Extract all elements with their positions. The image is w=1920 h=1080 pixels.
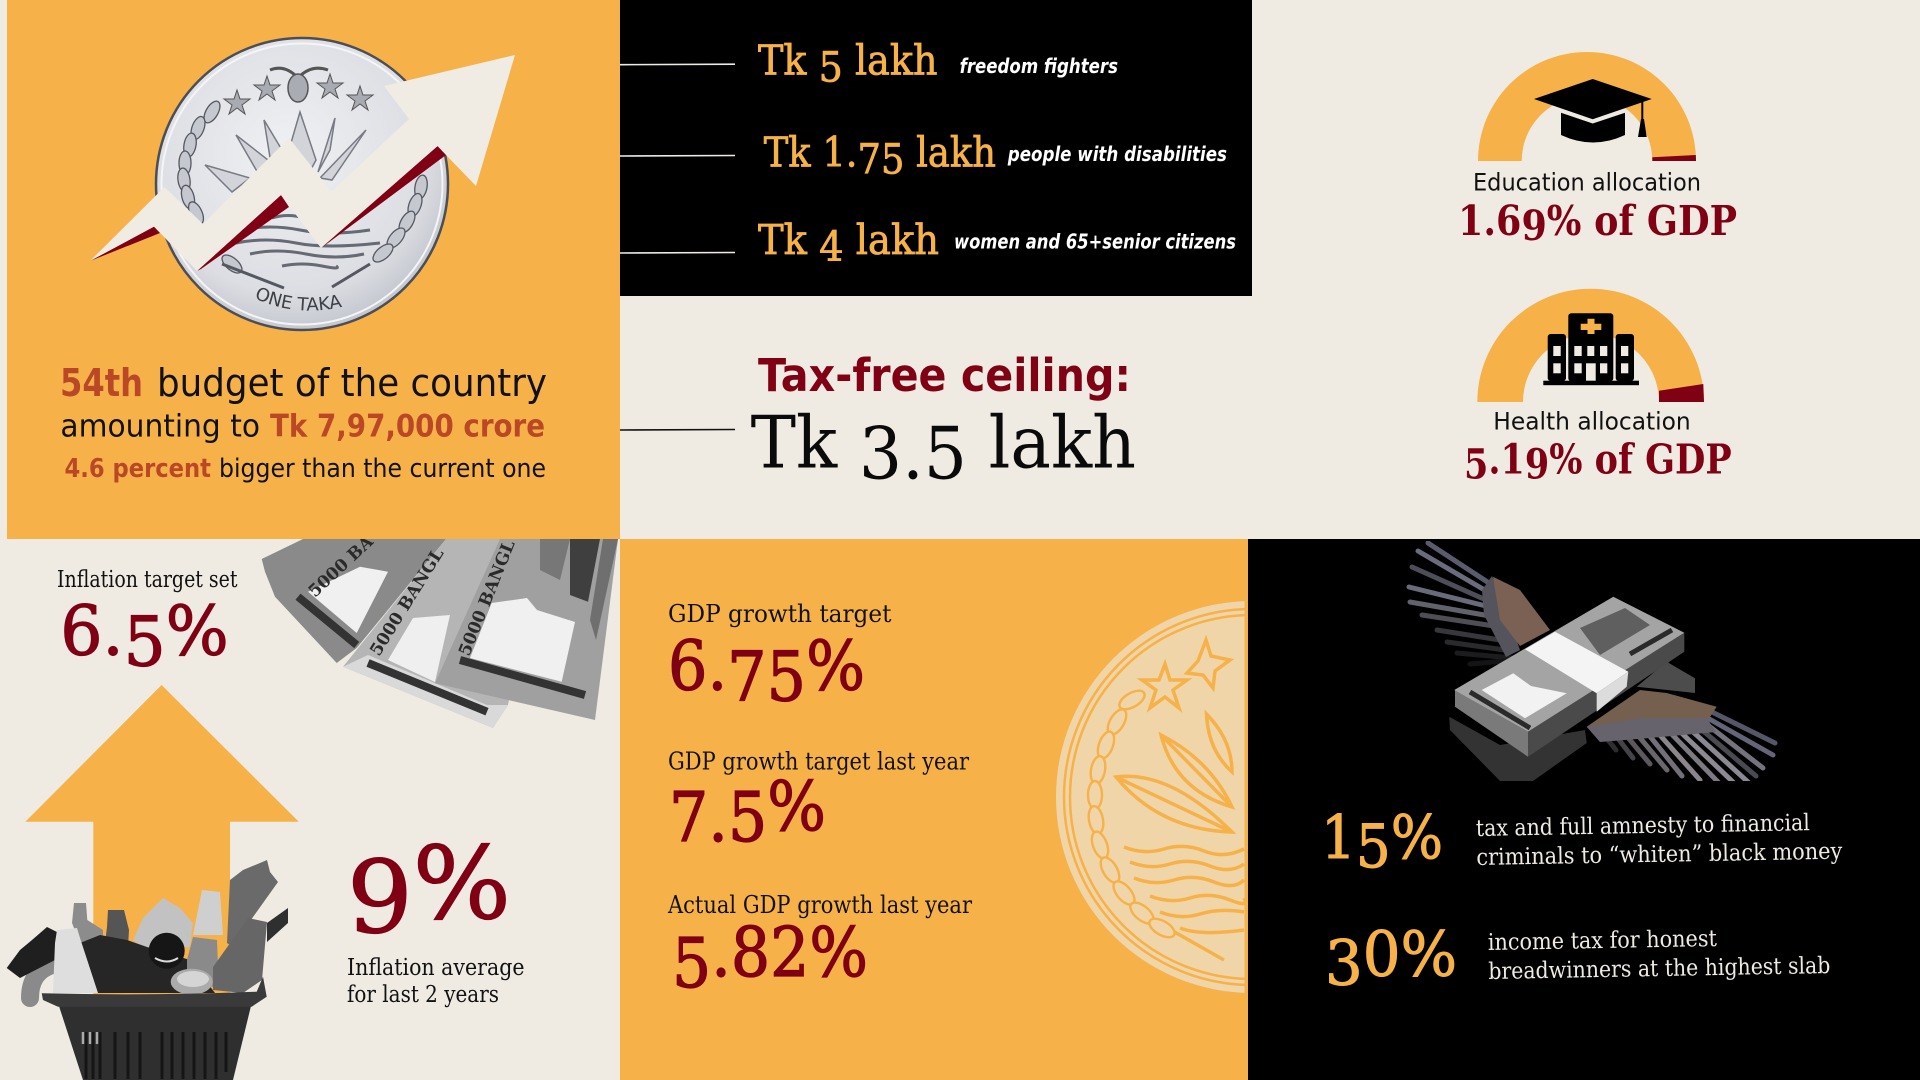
row: women and senior citizens — [620, 216, 1236, 271]
text: 54th budget of the country: 54th — [60, 361, 143, 405]
figure: 7.5%: 7.5 — [669, 779, 767, 858]
row: people with disabilities: 75 — [858, 136, 904, 184]
label: GDP growth target: GDP growth target — [668, 600, 892, 628]
row: freedom fighters: lakh — [843, 37, 938, 85]
figure: 6.75%: % — [806, 628, 865, 707]
figure: Tk 3.5 lakh: 3.5 — [859, 412, 967, 496]
panel: education allocation — [1458, 52, 1737, 250]
label: inflation average: Inflation average — [347, 955, 524, 981]
image: one taka coin — [154, 36, 450, 332]
text: amounting to Tk 7,97,000 crore: amounting to — [60, 409, 260, 445]
text: 4.6 percent bigger than the current one: 4.6 percent — [64, 454, 211, 484]
label: inflation average: for last 2 years — [347, 982, 499, 1008]
icon: rising zigzag arrow shadow — [90, 146, 446, 271]
left wing feathers — [1409, 543, 1518, 664]
figure: 1.69% of GDP: 9 — [1521, 202, 1547, 250]
label: education allocation: Education allocation — [1473, 169, 1701, 197]
image: winged money stack — [1409, 543, 1775, 782]
text: note denominations: 5000 BANGL — [455, 537, 520, 659]
figure: 30%: 0% — [1363, 918, 1457, 990]
text: income tax for honest breadwinners: breadwinners at the highest slab — [1488, 953, 1831, 985]
upper bundle sides — [1455, 690, 1528, 757]
label: actual GDP growth last year: Actual GDP growth last year — [667, 891, 972, 919]
text: tax and full amnesty: criminals to “whiten” black money — [1476, 839, 1843, 871]
panel: budget headline — [7, 0, 620, 539]
panel: GDP growth — [620, 539, 1248, 1080]
figure: 15%: % — [1391, 803, 1443, 873]
figure: 5.19% of GDP: 5 — [1464, 440, 1488, 488]
text: amounting to Tk 7,97,000 crore — [60, 409, 545, 445]
text: 4.6 percent bigger than the current one — [64, 454, 546, 484]
text: 54th budget of the country: budget of the country — [157, 361, 547, 405]
icon: graduation cap — [1534, 79, 1652, 142]
text: tax and full amnesty — [1476, 810, 1843, 871]
panel: tax-free ceiling — [620, 349, 1136, 496]
label: inflation target set: Inflation target set — [57, 567, 238, 593]
figure: 5.19% of GDP: % of GDP — [1549, 435, 1732, 483]
figure: Tk 3.5 lakh: lakh — [967, 401, 1136, 485]
panel: black money amnesty — [1248, 539, 1920, 1080]
figure: 5.19% of GDP: 9 — [1525, 440, 1549, 488]
text: note denominations: 5000 BA — [305, 531, 378, 602]
row: women and senior citizens: women and 65+senior citizens — [954, 230, 1236, 254]
panel: health allocation — [1464, 289, 1732, 488]
text: income tax for honest breadwinners: income tax for honest — [1488, 926, 1718, 956]
row: people with disabilities: Tk 1. — [764, 129, 868, 177]
figure: 6.75%: 6. — [668, 628, 733, 707]
row: women and senior citizens: lakh — [844, 216, 939, 264]
label: inflation average — [347, 955, 524, 1008]
figure: 9%: 9 — [347, 839, 413, 956]
figure: 6.75%: 75 — [727, 639, 806, 718]
row: people with disabilities — [620, 129, 1227, 184]
gauge: health — [1477, 289, 1704, 402]
figure: 5.19% of GDP: .1 — [1488, 435, 1525, 483]
row: women and senior citizens: Tk — [758, 216, 810, 264]
figure: 30%: 3 — [1325, 926, 1363, 1000]
figure: 7.5%: % — [767, 768, 826, 847]
lower bundle — [1637, 662, 1695, 693]
figure: 5.82%: .82% — [711, 914, 868, 993]
text: note denominations: 5000 BANGL — [366, 545, 448, 660]
image: grocery basket — [7, 860, 288, 1080]
text: 4.6 percent bigger than the current one: bigger than the current one — [219, 454, 546, 484]
right wing feathers — [1600, 712, 1775, 782]
heading: tax-free ceiling: Tax-free ceiling: — [758, 349, 1131, 402]
icon: hospital — [1543, 313, 1639, 385]
row: people with disabilities: lakh — [904, 129, 996, 177]
icon: rising zigzag arrow — [90, 55, 515, 271]
row: women and senior citizens: 4 — [819, 223, 844, 271]
row: freedom fighters: 5 — [819, 44, 843, 92]
figure: 1.69% of GDP: 1.6 — [1458, 197, 1529, 245]
panel: inflation — [7, 531, 618, 1080]
icon: up arrow — [25, 685, 299, 1000]
figure: 15%: 1 — [1321, 803, 1359, 873]
text: ONE TAKA coin legend: ONE TAKA — [256, 288, 342, 311]
label: GDP growth target last year: GDP growth target last year — [668, 748, 969, 776]
text: tax and full amnesty: tax and full amnesty to financial — [1476, 810, 1810, 842]
text: note denominations — [308, 539, 515, 656]
row: freedom fighters: Tk — [758, 37, 810, 85]
figure: 6.5%: 5 — [124, 604, 166, 682]
text: amounting to Tk 7,97,000 crore: Tk 7,97,000 crore — [270, 409, 545, 445]
figure: 6.5%: % — [166, 592, 229, 672]
row: freedom fighters — [620, 37, 1118, 92]
figure: 6.5%: 6. — [60, 592, 125, 672]
text: income tax for honest breadwinners — [1488, 924, 1831, 985]
row: people with disabilities: people with disabilities — [1007, 142, 1227, 166]
image: taka banknotes — [262, 531, 618, 728]
image: coin emblem line art — [1056, 601, 1244, 993]
figure: 5.82%: 5 — [672, 925, 711, 1004]
figure: 15%: 5 — [1356, 812, 1391, 882]
panel: tax-free thresholds — [620, 0, 1252, 296]
label: health allocation: Health allocation — [1493, 407, 1691, 435]
figure: 9%: % — [413, 825, 511, 942]
figure: 1.69% of GDP: % of GDP — [1547, 197, 1737, 245]
gauge: education — [1478, 52, 1696, 161]
row: freedom fighters: freedom fighters — [960, 54, 1118, 78]
figure: Tk 3.5 lakh: Tk — [751, 401, 842, 485]
